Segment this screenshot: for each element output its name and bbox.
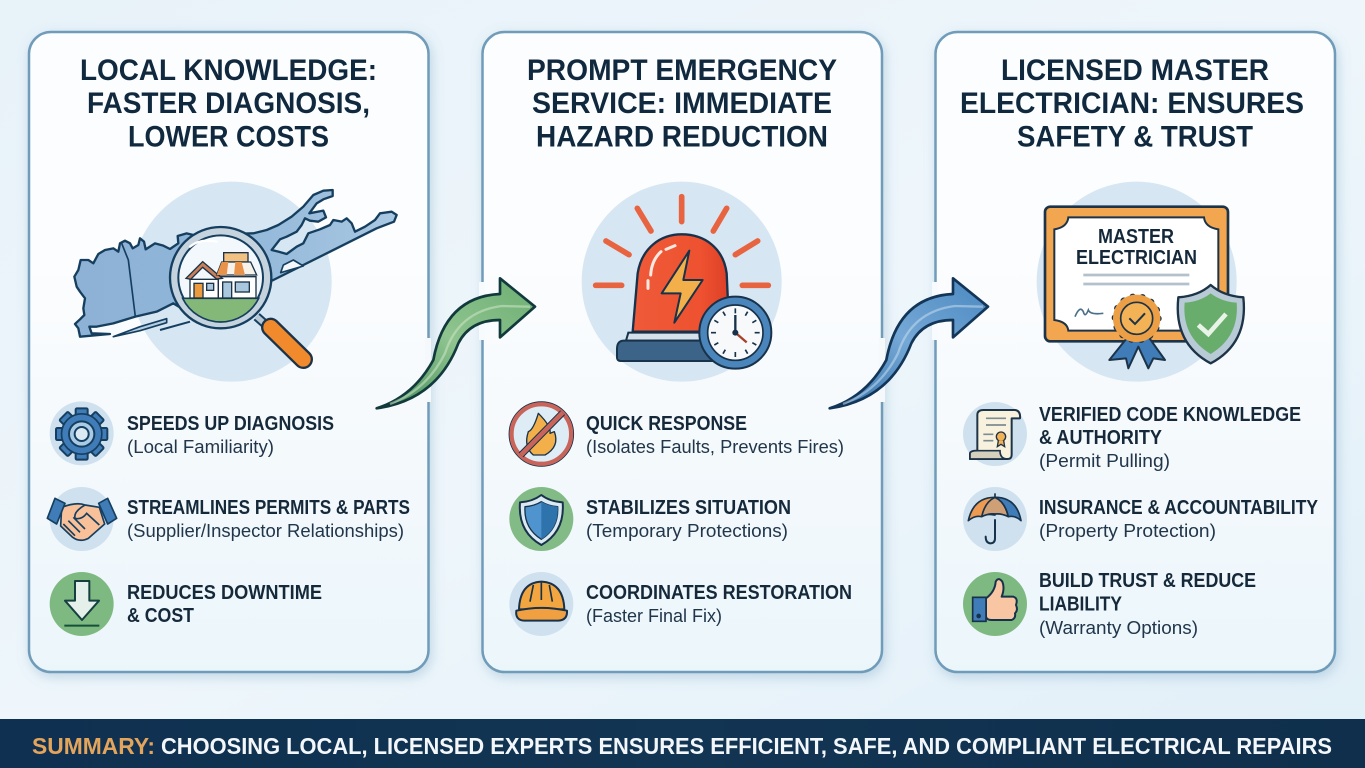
item: stabilizes situation: (Temporary Protections) xyxy=(586,520,788,541)
heading: prompt emergency service: PROMPT EMERGENCY xyxy=(527,54,837,87)
item: insurance and accountability: INSURANCE & ACCOUNTABILITY xyxy=(1039,496,1318,519)
item: reduces downtime and cost: REDUCES DOWNTIME xyxy=(127,581,322,604)
item: stabilizes situation: STABILIZES SITUATION xyxy=(586,496,791,519)
item: build trust and reduce liability: (Warranty Options) xyxy=(1039,617,1198,638)
item: verified code knowledge xyxy=(963,402,1301,471)
icon: handshake xyxy=(47,487,117,551)
icon: map with magnifying glass xyxy=(74,182,397,382)
item: build trust and reduce liability: BUILD TRUST & REDUCE xyxy=(1039,569,1256,592)
panel: licensed master electrician xyxy=(936,32,1335,672)
heading: licensed master electrician: SAFETY & TRUST xyxy=(1017,120,1253,154)
arrow: green, panel one to panel two xyxy=(377,278,535,408)
item: reduces downtime and cost xyxy=(50,572,322,636)
item: verified code knowledge: (Permit Pulling) xyxy=(1039,450,1170,471)
item: insurance and accountability xyxy=(963,487,1318,551)
item: coordinates restoration: COORDINATES RESTORATION xyxy=(586,581,852,604)
icon: certificate with seal and shield: ELECTRICIAN xyxy=(1076,247,1197,269)
heading: licensed master electrician: LICENSED MASTER xyxy=(1001,54,1269,87)
icon: scroll xyxy=(963,402,1027,466)
summary banner: CHOOSING LOCAL, LICENSED EXPERTS ENSURES EFFICIENT, SAFE, AND COMPLIANT ELECTRICAL REPAIRS xyxy=(161,733,1332,759)
item: speeds up diagnosis: (Local Familiarity) xyxy=(127,436,274,457)
item: quick response xyxy=(509,402,844,466)
item: reduces downtime and cost: & COST xyxy=(127,604,194,627)
icon: certificate with seal and shield xyxy=(1037,182,1244,382)
heading: licensed master electrician xyxy=(960,54,1304,154)
item: verified code knowledge: VERIFIED CODE KNOWLEDGE xyxy=(1039,403,1301,426)
icon: siren with clock xyxy=(582,182,782,382)
item: coordinates restoration xyxy=(509,572,852,636)
item: streamlines permits and parts: STREAMLINES PERMITS & PARTS xyxy=(127,496,410,519)
item: quick response: QUICK RESPONSE xyxy=(586,412,747,435)
heading: local knowledge xyxy=(80,54,377,154)
item: build trust and reduce liability xyxy=(963,569,1256,638)
icon: thumbs up xyxy=(963,572,1027,636)
summary banner: SUMMARY: xyxy=(32,733,155,759)
item: coordinates restoration: (Faster Final Fix) xyxy=(586,605,722,626)
heading: prompt emergency service xyxy=(527,54,837,154)
item: verified code knowledge: & AUTHORITY xyxy=(1039,426,1162,449)
item: streamlines permits and parts: (Supplier/Inspector Relationships) xyxy=(127,520,404,541)
heading: licensed master electrician: ELECTRICIAN: ENSURES xyxy=(960,87,1304,120)
icon: down arrow xyxy=(50,572,114,636)
icon: certificate with seal and shield: MASTER xyxy=(1098,226,1174,248)
item: streamlines permits and parts xyxy=(47,487,410,551)
heading: local knowledge: LOCAL KNOWLEDGE: xyxy=(80,54,377,87)
icon: shield xyxy=(509,487,573,551)
heading: local knowledge: FASTER DIAGNOSIS, xyxy=(87,87,370,120)
panel: local knowledge xyxy=(29,32,428,672)
panel: prompt emergency service xyxy=(482,32,882,672)
item: stabilizes situation xyxy=(509,487,791,551)
item: insurance and accountability: (Property Protection) xyxy=(1039,520,1216,541)
item: quick response: (Isolates Faults, Prevents Fires) xyxy=(586,436,844,457)
icon: no fire xyxy=(509,402,574,466)
heading: local knowledge: LOWER COSTS xyxy=(128,120,329,154)
icon: hard hat xyxy=(509,572,573,636)
icon: gear xyxy=(50,401,114,465)
arrow: blue, panel two to panel three xyxy=(830,278,988,408)
heading: prompt emergency service: HAZARD REDUCTION xyxy=(536,120,828,154)
item: speeds up diagnosis xyxy=(50,401,334,465)
icon: umbrella xyxy=(963,487,1027,551)
item: build trust and reduce liability: LIABILITY xyxy=(1039,592,1122,616)
item: speeds up diagnosis: SPEEDS UP DIAGNOSIS xyxy=(127,412,334,435)
heading: prompt emergency service: SERVICE: IMMEDIATE xyxy=(532,87,832,120)
summary banner xyxy=(0,719,1365,768)
